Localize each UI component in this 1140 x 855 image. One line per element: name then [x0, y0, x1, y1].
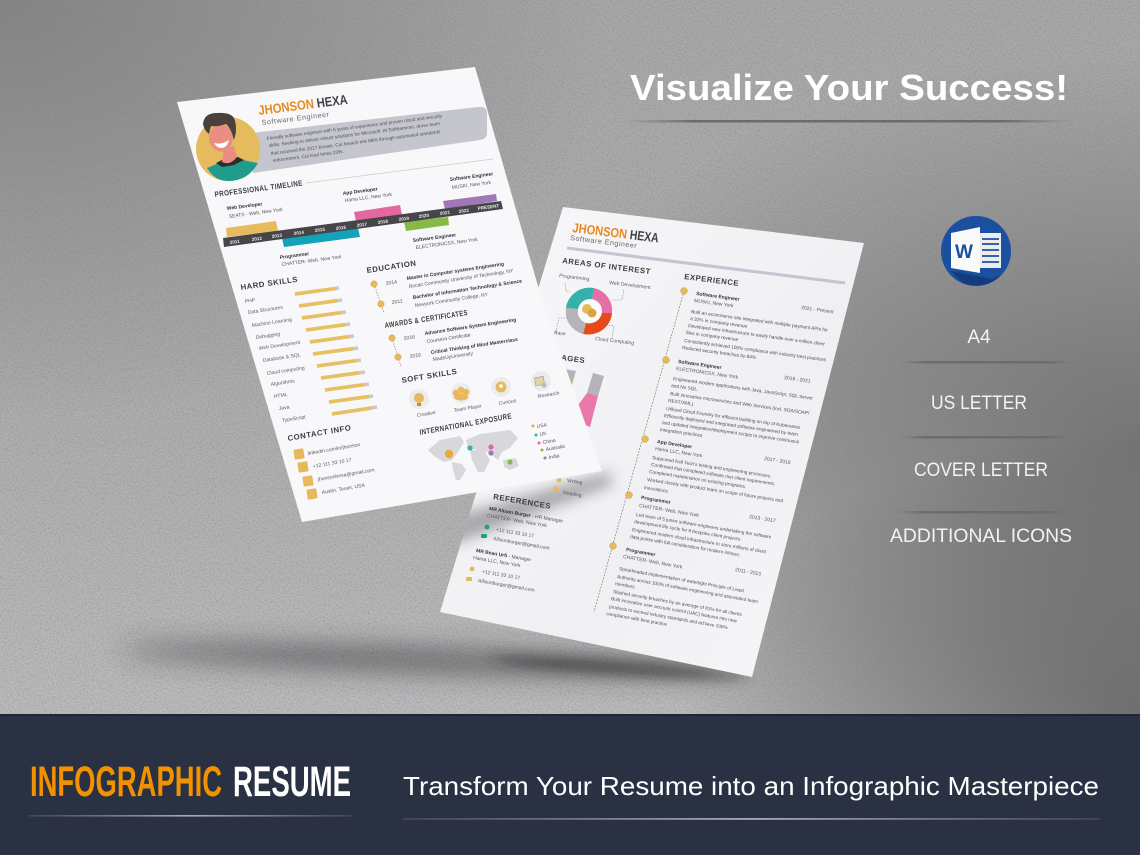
education list: Newyork Community College, NY [414, 292, 489, 309]
hard skill labels: PHP [244, 297, 256, 305]
bar: language A [565, 369, 576, 388]
timeline labels: Programmer [279, 251, 310, 261]
hard skill labels: Machine Learning [251, 317, 292, 329]
timeline labels: Software Engineer [412, 232, 457, 244]
experience entry 1 [682, 291, 835, 363]
donut labels: Base [554, 330, 566, 337]
bar: language B [576, 373, 604, 427]
panel: back resume sheet [440, 207, 864, 677]
banner [0, 714, 1140, 855]
timeline labels: ELECTRONICSX, New York [415, 237, 479, 251]
name: HEXA [316, 92, 349, 111]
experience entry 3: Worked closely with product team on scope of future projects and [647, 477, 784, 504]
experience entry 3: Completed maintenance on existing programs. [649, 469, 747, 490]
hard skill labels: HTML [273, 392, 288, 400]
experience entry 2: REST/XML). [668, 398, 695, 408]
timeline chart: PRESENT [477, 203, 500, 211]
hard skill labels [244, 297, 307, 424]
panel: front resume sheet [177, 67, 602, 522]
contact list: linkedin.com/in/jhonson [307, 442, 361, 457]
awards list [389, 317, 519, 366]
format: Cover Letter: COVER LETTER [914, 460, 1048, 481]
experience entry 1: Consistently achieved 100% compliance with industry best practices [684, 338, 827, 363]
donut labels [554, 273, 651, 347]
experience entry 2: Software Engineer [678, 359, 722, 371]
experience entry 1: 2021 - Present [801, 305, 835, 315]
experience timeline spine [594, 288, 687, 612]
icon: Microsoft Word [941, 216, 1011, 286]
name: HEXA [629, 227, 660, 245]
timeline labels: SEATS - Web, New York [228, 207, 284, 220]
experience entry 1: a 32% in company revenue [690, 316, 748, 330]
experience entry 3 [644, 439, 791, 504]
awards list: 2016 [409, 352, 422, 360]
summary box [252, 107, 487, 173]
brand wordmark: RESUME [233, 758, 351, 806]
education list: 2011 [391, 298, 403, 306]
experience entry 4: Programmer [641, 495, 671, 506]
floating shadow beneath the sheets [120, 639, 750, 683]
timeline chart: 2018 [377, 219, 389, 225]
experience entry 5 [606, 547, 762, 631]
soft skill labels: Curious [498, 398, 517, 407]
brand wordmark: INFOGRAPHIC [30, 758, 222, 806]
experience entry 4 [630, 495, 776, 558]
reference 2: Allisonburger@gmail.com [478, 578, 535, 594]
education list [371, 261, 523, 313]
heading: education: EDUCATION [366, 259, 417, 275]
donut chart: areas of interest [556, 283, 624, 338]
heading: international exposure: INTERNATIONAL EXPOSURE [419, 411, 512, 437]
tagline: Transform Your Resume into an Infographic Masterpiece [403, 771, 1099, 801]
bar chart: hard skills [295, 288, 377, 414]
experience entry 1: Developed new infrastructure to easily handle over a million client [688, 323, 826, 348]
heading: awards and certificates: AWARDS & CERTIFICATES [384, 308, 468, 330]
interests: writing and reading: Reading [563, 490, 582, 499]
timeline labels: CHATTER- Web, New York [281, 254, 342, 268]
experience entry 5: 2011 - 2013 [735, 567, 762, 578]
map legend: China [542, 438, 556, 446]
interests: writing and reading [553, 478, 583, 499]
format list [890, 327, 1076, 547]
experience entry 4: Led team of 5 junior software engineers undertaking the software [636, 512, 772, 541]
soft skill labels: Team Player [453, 403, 483, 414]
reference 1: CHATTER- Web, New York [487, 513, 548, 529]
role: Software Engineer [570, 234, 638, 250]
timeline labels: Software Engineer [449, 171, 494, 183]
reference 2: +12 111 33 10 17 [482, 569, 521, 582]
awards list: MadeUpUniversity [432, 351, 474, 363]
timeline labels: Hama LLC, New York [344, 192, 393, 204]
reference 2: Hama LLC, New York [473, 555, 521, 569]
timeline chart: 2012 [251, 236, 263, 242]
reference 1 [481, 506, 564, 552]
summary text [266, 113, 443, 164]
timeline chart: 2019 [398, 216, 410, 222]
timeline chart: 2022 [458, 208, 470, 214]
experience entry 5: CHATTER- Web, New York [623, 554, 683, 571]
timeline chart: 2015 [314, 227, 326, 233]
summary text: that received the 2017 Bossie. Cut breach risk 68% through automated standards [270, 129, 441, 157]
education list: Bachelor of Information Technology & Science [412, 278, 523, 301]
experience entry 2: and No SQL. [671, 383, 699, 393]
format: Additional Icons: ADDITIONAL ICONS [890, 526, 1072, 547]
soft skill labels: Research [537, 390, 560, 400]
experience entry 5: products to exceed industry standards and achieve 100% [609, 604, 729, 631]
experience entry 2: integration practices [660, 427, 703, 439]
experience entry 4: data points with full consideration for modern infosec. [630, 534, 741, 558]
contact list: jhonsonhexa@gmail.com [316, 467, 375, 483]
interests: writing and reading: Writing [567, 478, 583, 486]
experience entry 4: Engineered modern cloud infrastructure to store millions of client [632, 527, 767, 555]
experience entry 5: Programmer [626, 547, 656, 558]
icon: Microsoft Word: W [955, 242, 973, 263]
education list: Master in Computer systems Engineering [406, 261, 504, 282]
shadow cast by front sheet [440, 472, 612, 545]
timeline labels: Web Developer [226, 201, 263, 212]
name: JHONSON [257, 96, 315, 118]
experience entry 2: Efficiently deployed and integrated software engineered by team [664, 413, 798, 438]
hard skill labels: Cloud computing [266, 365, 305, 377]
world map [428, 430, 519, 480]
experience entry 1: Reduced security breaches by 84% [682, 345, 757, 361]
heading: contact info: CONTACT INFO [287, 423, 352, 443]
role: Software Engineer [261, 111, 330, 127]
experience entry 2 [660, 359, 814, 445]
timeline chart: 2014 [293, 230, 305, 236]
experience entry 3: Hama LLC, New York [655, 446, 703, 459]
summary text: enforcement. Cut lead times 23%. [272, 149, 344, 164]
heading: hard skills: HARD SKILLS [240, 275, 299, 292]
divider under heading [625, 120, 1072, 122]
awards list: Critical Thinking of Mind Masterclass [430, 337, 519, 356]
experience entry 1: Software Engineer [696, 291, 740, 303]
timeline chart [223, 194, 503, 247]
reference 1: MR Alison Burger - HR Manager [489, 506, 564, 525]
contact list: Austin, Texas, USA [321, 483, 366, 496]
awards list: 2016 [403, 334, 416, 342]
hard skill labels: Data Structures [247, 305, 284, 316]
experience entry 4: 2013 - 2017 [749, 514, 776, 524]
map legend: India [548, 453, 560, 461]
experience entry 2: and updated integration/deployment scripts to improve continuous [662, 420, 800, 445]
experience entry 5: members [615, 581, 636, 591]
hard skill labels: Web Development [258, 340, 301, 352]
heading: languages (partly hidden): AGES [561, 353, 586, 365]
soft skill icons [409, 371, 551, 409]
timeline chart: 2011 [229, 239, 240, 245]
donut labels: Web Development [609, 280, 651, 291]
experience entry 3: innovations [644, 485, 669, 495]
format: US Letter: US LETTER [931, 393, 1027, 414]
experience entry 1: MUSKI, New York [694, 298, 734, 309]
timeline chart: 2016 [335, 225, 347, 231]
reference 2: MR Bean Urfi - Manager [476, 548, 532, 563]
hard skill labels: Debugging [255, 331, 281, 341]
experience entry 4: CHATTER- Web, New York [639, 503, 700, 519]
reference 2 [466, 548, 535, 594]
timeline chart: 2017 [356, 222, 368, 228]
experience entry 2: 2019 - 2021 [784, 375, 811, 385]
experience entry 4: development life cycle for 9 bespoke client projects. [634, 519, 742, 543]
experience entry 3: 2017 - 2019 [764, 456, 791, 466]
reference 1: Allisonburger@gmail.com [493, 536, 550, 552]
contact list [293, 442, 375, 500]
name [257, 92, 349, 118]
education list: 2014 [385, 279, 398, 287]
map legend [532, 422, 566, 461]
heading: soft skills: SOFT SKILLS [401, 367, 458, 385]
name: JHONSON [572, 220, 628, 242]
experience entry 3: App Developer [657, 439, 692, 450]
header rule [567, 248, 845, 283]
summary text: Friendly software engineer with 5 years of experience and proven cloud and security [266, 113, 443, 142]
experience entry 1: files in company revenue [686, 330, 739, 343]
soft skill labels: Creative [416, 410, 436, 419]
hard skill labels: Database & SQL [262, 352, 301, 364]
timeline chart: 2020 [418, 213, 430, 219]
timeline labels: MUSKI, New York [451, 180, 492, 191]
soft skill labels [416, 390, 560, 419]
experience entry 5: Authority across 100% of software engineering and associated team [617, 574, 758, 605]
experience entry 2: Utilized Cloud Foundry for efficient building on top of Kubernetes [666, 406, 801, 431]
hard skill labels: TypeScript [281, 414, 307, 424]
donut labels: Programming [559, 273, 590, 283]
experience entry 5: Spearheaded implementation of watertight Principle of Least [619, 566, 745, 594]
hard skill labels: Algorithms [270, 378, 296, 388]
experience entry 3: Confirmed that completed software met client requirements. [651, 462, 776, 487]
contact list: +12 111 33 10 17 [312, 457, 352, 470]
heading: areas of interest: AREAS OF INTEREST [562, 256, 651, 276]
experience entry 2: ELECTRONICSX, New York [676, 366, 739, 381]
hard skill labels: Java [278, 404, 290, 412]
reference 1: +12 111 33 10 17 [496, 527, 535, 540]
education list: Rocan Community University of Technology, NY [408, 268, 514, 290]
experience entry 3: Supported Kell Tech's testing and engineering processes. [652, 455, 772, 480]
experience entry 2: Engineered modern applications with Java, JavaScript, SQL Server [673, 376, 814, 402]
awards list: Advance Software System Engineering [424, 317, 517, 337]
donut labels: Cloud Computing [595, 336, 635, 347]
experience entry 2: Built innovative microservices and Web Services (incl. SOA/SOAP/ [670, 391, 810, 417]
heading: professional timeline: PROFESSIONAL TIMELINE [214, 179, 303, 199]
timeline labels: App Developer [342, 186, 378, 197]
map legend: Australia [545, 444, 566, 453]
heading: experience: EXPERIENCE [684, 272, 740, 288]
experience entry 5: compliance with best practice [606, 611, 668, 628]
experience entry 1: Built an ecommerce site integrated with multiple payment APIs for [691, 309, 829, 334]
timeline chart: 2021 [439, 210, 451, 216]
map legend: UK [539, 431, 548, 438]
timeline labels [226, 171, 494, 268]
experience entry 5: Slashed security breaches by an average of 81% for all clients [613, 589, 743, 618]
avatar [196, 113, 260, 181]
heading: Visualize Your Success: Visualize Your Success! [630, 67, 1068, 108]
awards list: Coursera Certificate [426, 332, 471, 345]
name [572, 220, 660, 245]
experience entry 5: Built innovative user account control (UAC) features into new [611, 596, 738, 625]
map legend: USA [536, 422, 548, 430]
heading: references: REFERENCES [493, 492, 552, 511]
summary text: skills. Seeking to deliver robust solutions for Microsoft. At Softhammer, drove team [268, 121, 440, 149]
format: A4: A4 [967, 327, 991, 348]
timeline chart: 2013 [271, 233, 283, 239]
